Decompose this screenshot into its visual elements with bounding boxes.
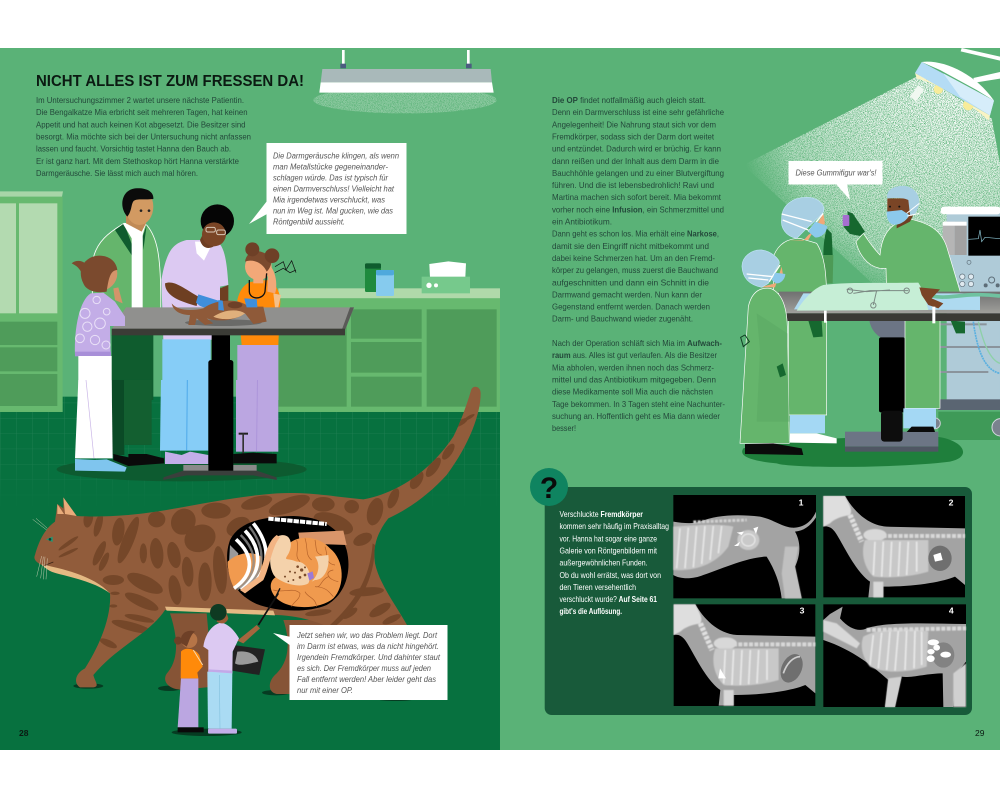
heading: NICHT ALLES IST ZUM FRESSEN DA! [36, 73, 304, 90]
floor shadow under group [57, 457, 307, 481]
speech bubble: Hanna: nun im Weg ist. Mal gucken, wie das [273, 207, 393, 216]
x-ray 1: 1 [799, 497, 804, 507]
illustration: operating room [740, 48, 1000, 467]
x-ray view into the abdomen [227, 516, 348, 611]
surgeon Ravi [843, 186, 965, 432]
man with jacket [92, 188, 164, 466]
x-ray 2: 2 [949, 497, 954, 507]
operation text block: damit sie den Eingriff nicht mitbekommt und [552, 241, 709, 251]
operating lamp [910, 48, 1000, 121]
illustration: bengal cat with x-ray view [33, 387, 481, 736]
operation text block: aufgeschnitten und dann ein Schnitt in die [552, 277, 709, 287]
speech bubble: diagnosis: es sich. Der Fremdkörper muss auf jeden [297, 664, 431, 673]
quiz text: Verschluckte Fremdkörper [560, 510, 644, 519]
icon: question mark: ? [540, 472, 558, 505]
operation text block: dann reißen und der Inhalt aus dem Darm in die [552, 156, 719, 166]
quiz text: vor. Hanna hat sogar eine ganze [560, 534, 657, 543]
cat coat markings [57, 413, 475, 650]
operation text block: diese Medikamente soll Mia auch die nächsten [552, 387, 713, 397]
jars [365, 263, 394, 296]
x-ray 4: 4 [949, 606, 954, 616]
kitten on table [172, 298, 267, 326]
operating light beam [743, 75, 1000, 293]
operation text block: mittel und das Antibiotikum mitgegeben. Denn [552, 374, 716, 384]
speech bubble: Hanna: Mia irgendetwas verschluckt, was [273, 196, 385, 205]
paw shadows [73, 683, 413, 701]
counter with cupboards [278, 288, 500, 412]
icon: question mark [530, 468, 568, 506]
x-ray 1 [673, 495, 816, 598]
surgeon Martina [773, 197, 837, 443]
operation text block [552, 95, 725, 433]
operation text block: und entzündet. Dadurch wird er brüchig. Er kann [552, 144, 721, 154]
quiz text: Galerie von Röntgenbildern mit [560, 546, 658, 556]
small assistant [740, 250, 803, 455]
operation text block: Martina machen sich sofort bereit. Mia bekommt [552, 192, 722, 202]
operating table [778, 283, 1000, 323]
intro text block: Im Untersuchungszimmer 2 wartet unsere nächste Patientin. [36, 95, 244, 105]
examination table [112, 307, 354, 480]
operation text block: Darmwand gemacht werden. Nun kann der [552, 289, 702, 299]
operation text block: Bauchhöhle gelangen und zu einer Blutvergiftung [552, 168, 724, 178]
speech bubble: diagnosis [273, 625, 448, 700]
quiz text [560, 510, 669, 616]
operation text block: dabei keine Schmerzen hat. Um an den Fremd- [552, 253, 715, 263]
operation text block: besser! [552, 423, 576, 433]
speech bubble: diagnosis: Fall entfernt werden! Aber leider geht das [297, 675, 436, 684]
operation text block: suchung an. Hoffentlich geht es Mia dann wieder [552, 411, 720, 421]
intro text block [36, 95, 251, 178]
speech bubble: Hanna: schlagen würde. Das ist typisch für [273, 174, 388, 183]
operation text block: Gegenstand entfernt werden. Danach werden [552, 302, 710, 312]
operation text block: raum aus. Alles ist gut verlaufen. Als die Besitzer [552, 350, 717, 360]
page number 29: 29 [975, 728, 985, 738]
speech bubble: Hanna: man Metallstücke gegeneinander- [273, 163, 388, 172]
tissue box [422, 261, 470, 293]
operation text block: Nach der Operation schläft sich Mia im Aufwach- [552, 338, 722, 348]
x-ray 2 [823, 496, 965, 597]
x-ray 3 [674, 604, 815, 706]
page number 28: 28 [19, 728, 29, 738]
intro text block: lassen und faucht. Vorsichtig tastet Hanna den Bauch ab. [36, 144, 231, 154]
quiz text: kommen sehr häufig im Praxisalltag [560, 522, 669, 531]
x-ray images [673, 495, 966, 707]
intro text block: Er ist ganz hart. Mit dem Stethoskop hört Hanna verstärkte [36, 156, 239, 166]
cat chest and belly [42, 564, 275, 615]
anaesthesia machine [930, 207, 1000, 436]
speech bubble: Hanna: Röntgenbild aussieht. [273, 218, 345, 227]
operating table column [845, 321, 938, 452]
cat face details [33, 518, 53, 579]
operation text block: Mia abholen, werden ihnen noch das Schmerz- [552, 362, 714, 372]
x-ray 4 [823, 604, 966, 707]
quiz text: den Tieren versehentlich [560, 583, 636, 592]
operation text block: führen. Und die ist lebensbedrohlich! Ravi und [552, 180, 714, 190]
floor [0, 397, 500, 750]
speech bubble: Hanna: Die Darmgeräusche klingen, als wenn [273, 152, 399, 161]
operation text block: Darm- und Bauchwand wieder zugenäht. [552, 314, 693, 324]
operation text block: ein Antibiotikum. [552, 216, 612, 226]
operation text block: vorher noch eine Infusion, ein Schmerzmittel und [552, 204, 724, 214]
child watching x-ray view [174, 631, 204, 732]
quiz text: Ob du wohl errätst, was dort von [560, 571, 661, 580]
speech bubble: rubber figure: Diese Gummifigur war's! [796, 168, 877, 178]
cat far legs [165, 613, 333, 694]
cat body [34, 387, 481, 700]
vet Hanna [160, 204, 234, 464]
intro text block: besorgt. Mia möchte sich bei der Untersuchung nicht anfassen [36, 132, 251, 142]
green floor platform [742, 412, 1000, 467]
x-ray 3: 3 [800, 606, 805, 616]
speech bubble: diagnosis: Irgendein Fremdkörper. Und dahinter staut [297, 653, 441, 662]
girl with stethoscope [233, 242, 296, 463]
panel: quiz box [530, 468, 972, 715]
panel: left page background [0, 48, 500, 750]
ceiling lamp [313, 50, 497, 113]
speech bubble: Hanna [249, 143, 406, 234]
panel: right page background [500, 48, 1000, 750]
quiz text: gibt's die Auflösung. [560, 607, 622, 616]
cat ears [57, 497, 77, 516]
operation text block: Angelegenheit! Die Nahrung staut sich vor dem [552, 119, 716, 129]
vet pointing at x-ray view [172, 593, 278, 736]
quiz text: außergewöhnlichen Funden. [560, 559, 648, 568]
speech bubble: diagnosis: im Darm ist etwas, was da nicht hingehört. [297, 642, 439, 651]
operation text block: Die OP findet notfallmäßig auch gleich statt. [552, 95, 706, 105]
intro text block: Darmgeräusche. Sie lässt mich auch mal hören. [36, 168, 198, 178]
operation text block: Denn ein Darmverschluss ist eine sehr gefährliche [552, 107, 724, 117]
operation text block: Fremdkörper, sodass sich der Darm dort weitet [552, 132, 715, 142]
child in lilac blouse [72, 256, 127, 472]
quiz text: verschluckt wurde? Auf Seite 61 [560, 595, 657, 604]
intro text block: Appetit und hat auch keinen Kot abgesetzt. Die Besitzer sind [36, 119, 246, 129]
speech bubble: Hanna: einen Darmverschluss! Vielleicht hat [273, 185, 395, 194]
illustration: examination room [0, 50, 500, 750]
operation text block: körper zu gelangen, muss zuerst die Bauchwand [552, 265, 718, 275]
left cabinet [0, 191, 63, 412]
speech bubble: diagnosis: nur mit einer OP. [297, 686, 353, 695]
speech bubble: diagnosis: Jetzt sehen wir, wo das Problem liegt. Dort [296, 631, 438, 640]
operation text block: Dann geht es schon los. Mia erhält eine Narkose, [552, 229, 719, 239]
speech bubble: rubber figure [788, 161, 882, 200]
operation text block: Tage bekommen. In 3 Tagen steht eine Nachunter- [552, 399, 725, 409]
intro text block: Die Bengalkatze Mia erbricht seit mehreren Tagen, hat keinen [36, 107, 248, 117]
